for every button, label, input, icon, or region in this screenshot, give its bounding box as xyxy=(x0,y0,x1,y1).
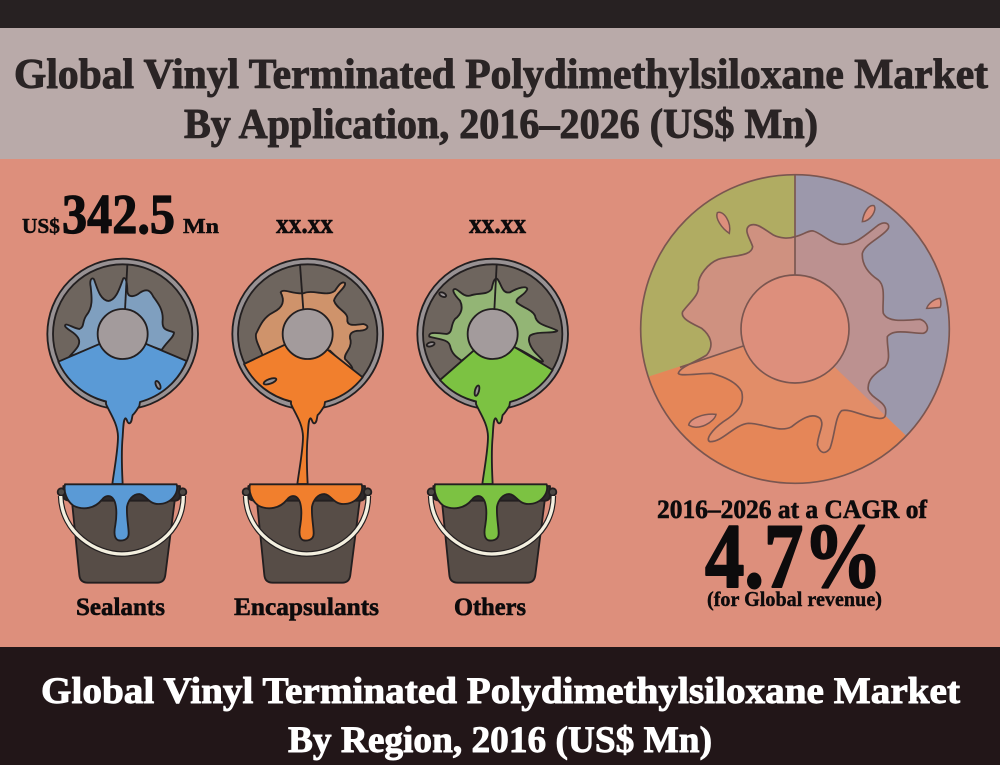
label: Others: Others xyxy=(454,594,526,621)
dish ring xyxy=(417,259,568,409)
bucket xyxy=(243,486,371,583)
icon: Sealants dish and bucket xyxy=(47,259,198,583)
small drops xyxy=(689,206,941,427)
paint over bucket xyxy=(250,484,362,541)
icon: Encapsulants dish and bucket xyxy=(232,259,383,583)
pouring paint xyxy=(440,334,553,484)
paint over bucket xyxy=(435,484,547,541)
value: Encapsulants: xx.xx xyxy=(276,209,333,240)
segment: orange xyxy=(648,329,906,483)
top dark bar xyxy=(0,0,1000,28)
splash xyxy=(65,278,174,357)
title: By Application, 2016–2026 (US$ Mn) xyxy=(184,102,818,148)
splash xyxy=(256,282,367,372)
paint over bucket xyxy=(65,484,177,541)
main panel background xyxy=(0,159,1000,647)
donut chart xyxy=(641,175,949,483)
label: Sealants: Sealants xyxy=(76,594,165,621)
splash xyxy=(429,279,557,362)
CAGR note: (for Global revenue) xyxy=(707,587,882,611)
bucket handle xyxy=(61,496,183,554)
hub xyxy=(98,309,148,359)
segment: olive xyxy=(641,175,795,377)
donut centre xyxy=(741,275,849,383)
small drops xyxy=(426,291,447,347)
CAGR value: 4.7% xyxy=(705,505,882,607)
bucket handle xyxy=(246,496,368,554)
title band xyxy=(0,28,1000,159)
bucket handle xyxy=(431,496,553,554)
value: Sealants: Mn xyxy=(183,214,219,238)
outlines xyxy=(641,175,949,483)
dish ring xyxy=(47,259,198,409)
value: Sealants: 342.5 xyxy=(62,184,175,246)
title: Global Vinyl Terminated Polydimethylsiloxane Market xyxy=(14,52,988,98)
bucket xyxy=(428,486,556,583)
footer title xyxy=(41,671,961,761)
hub xyxy=(283,309,333,359)
pouring paint xyxy=(58,334,187,484)
dish ring xyxy=(232,259,383,409)
title xyxy=(14,52,988,148)
value: Others: xx.xx xyxy=(469,209,526,240)
footer title: Global Vinyl Terminated Polydimethylsiloxane Market xyxy=(41,671,961,712)
icon: Others dish and bucket xyxy=(417,259,568,583)
value: Sealants: US$ xyxy=(22,214,60,238)
bucket xyxy=(58,486,186,583)
footer title: By Region, 2016 (US$ Mn) xyxy=(288,720,712,761)
footer band xyxy=(0,647,1000,765)
splash overlay xyxy=(678,223,927,452)
segment: purple xyxy=(795,175,948,436)
pouring paint xyxy=(244,334,363,484)
hub xyxy=(468,309,518,359)
label: Encapsulants: Encapsulants xyxy=(234,594,379,621)
value: Sealants xyxy=(22,184,219,246)
CAGR heading: 2016–2026 at a CAGR of xyxy=(657,495,927,524)
